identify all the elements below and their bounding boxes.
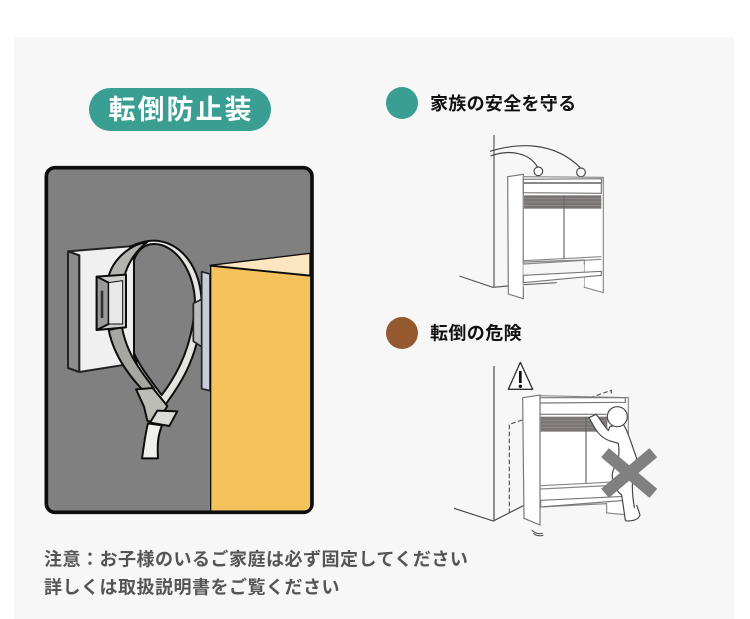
diagram: cabinet tipping [454,362,653,536]
bullet: tipping danger: 転倒の危険 [430,324,522,344]
heading: 転倒防止装 [89,88,271,131]
bullet: tipping danger [386,317,522,349]
bullet: family safety: 家族の安全を守る [430,93,576,114]
note text: 注意：お子様のいるご家庭は必ず固定してください [44,548,468,570]
icon: cross mark [605,453,653,493]
cabinet body [523,177,603,293]
note text [44,548,468,598]
open cabinet interior [210,253,310,275]
strap upper left band [109,242,147,277]
wall plate [68,246,134,372]
cabinet body [540,396,628,515]
cabinet side panel [508,174,523,299]
strap fastener and tail [136,388,177,458]
illustration: anti-tip strap on wall [46,168,312,512]
straps [490,146,581,169]
wall background [46,168,312,512]
diagram: secured cabinet [459,135,603,299]
bullet: family safety [386,87,576,119]
cabinet side [211,266,310,510]
icon: warning triangle [508,362,533,389]
floor vibration marks [532,530,543,536]
child figure [589,407,640,521]
heading: 転倒防止装: 転倒防止装 [108,95,254,125]
wall lines [459,135,508,287]
note text: 詳しくは取扱説明書をご覧ください [44,576,340,598]
shutter band [541,417,607,432]
cabinet side panel [523,395,540,525]
shutter band [524,195,601,209]
strap loop [130,241,202,407]
wall lines [454,366,523,521]
dashed outline of cabinet [509,390,611,512]
strap buckle [97,275,126,330]
strap lower left band [109,327,154,391]
cabinet bracket [193,272,210,391]
